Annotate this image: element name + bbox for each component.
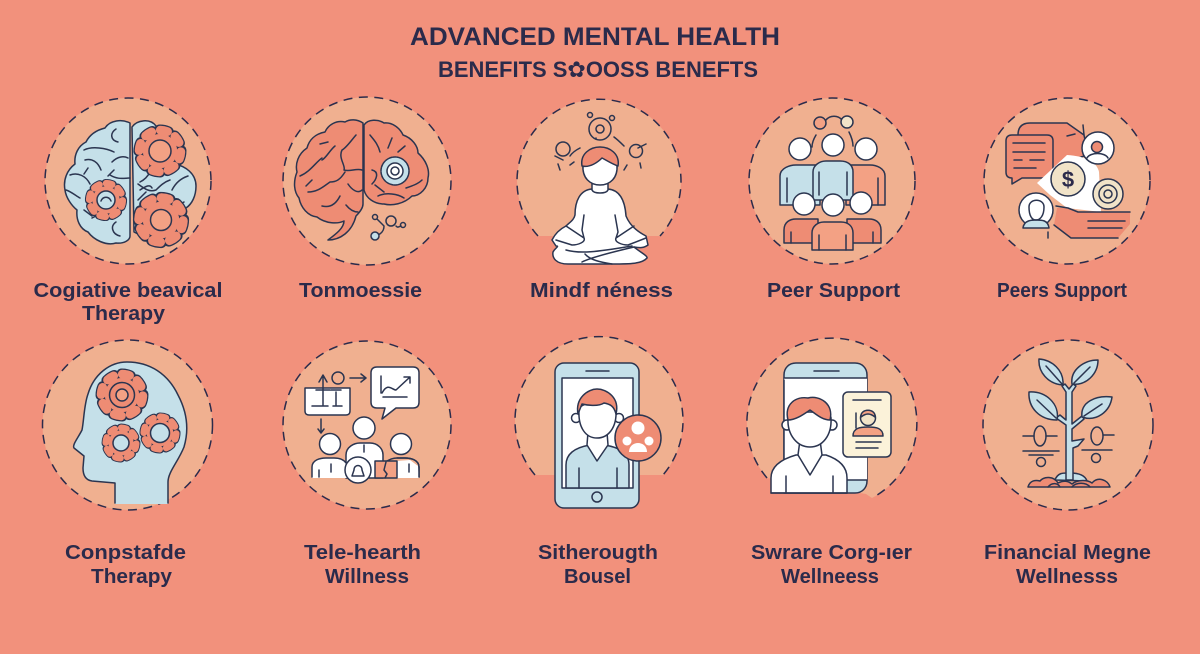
label: peer support: Peer Support <box>767 280 900 302</box>
title: BENEFITS S✿OOSS BENEFTS <box>438 57 758 82</box>
title: ADVANCED MENTAL HEALTH <box>410 23 780 51</box>
panel: video counsel <box>515 337 683 588</box>
panel: corporate wellness <box>747 338 917 588</box>
label: corporate wellness: Wellneess <box>781 566 879 588</box>
panel: mindfulness <box>517 99 681 302</box>
panel: telehealth <box>283 341 451 588</box>
label: peers support: Peers Support <box>997 280 1127 302</box>
label: cognitive therapy <box>34 280 222 325</box>
icon: phone with counsellor <box>555 363 661 508</box>
panel: compassionate therapy <box>42 340 212 588</box>
title <box>410 23 780 82</box>
label: mindfulness: Mindf néness <box>530 280 673 302</box>
icon: coral brain <box>295 120 429 240</box>
icon: head with gears <box>74 362 187 504</box>
label: video counsel: Sitherougth <box>538 542 658 564</box>
label: tonmoessie: Tonmoessie <box>299 280 422 302</box>
icon: chat, coins and hands: $ <box>1062 167 1074 192</box>
icon: app with person and profile card <box>771 363 891 493</box>
label: financial wellness: Wellnesss <box>1016 566 1118 588</box>
panel: cognitive therapy <box>34 98 222 325</box>
icon: meditating person <box>552 112 648 264</box>
icon: growing plant with coins <box>1023 359 1114 487</box>
icon: chat, coins and hands <box>1006 123 1130 238</box>
label: cognitive therapy: Therapy <box>82 303 166 325</box>
panel: peers support money <box>984 98 1150 302</box>
icon: group of people <box>780 116 885 250</box>
icon: team with chart <box>305 367 419 483</box>
label: cognitive therapy: Cogiative beavical <box>34 280 222 302</box>
panel: tonmoessie <box>283 97 451 302</box>
panel: peer support <box>749 98 915 302</box>
label: telehealth: Willness <box>325 566 409 588</box>
label: financial wellness <box>984 542 1151 588</box>
label: corporate wellness <box>751 542 912 588</box>
label: telehealth: Tele-hearth <box>304 542 421 564</box>
label: video counsel <box>538 542 658 588</box>
label: telehealth <box>304 542 421 588</box>
icon: brain with gears <box>64 121 196 244</box>
label: video counsel: Bousel <box>564 566 631 588</box>
label: financial wellness: Financial Megne <box>984 542 1151 564</box>
label: compassionate therapy: Conpstafde <box>65 542 186 564</box>
label: corporate wellness: Swrare Corg-ıer <box>751 542 912 564</box>
label: compassionate therapy <box>65 542 186 588</box>
icon: molecule nodes <box>371 214 406 240</box>
label: compassionate therapy: Therapy <box>91 566 173 588</box>
panel: financial wellness <box>983 340 1153 588</box>
